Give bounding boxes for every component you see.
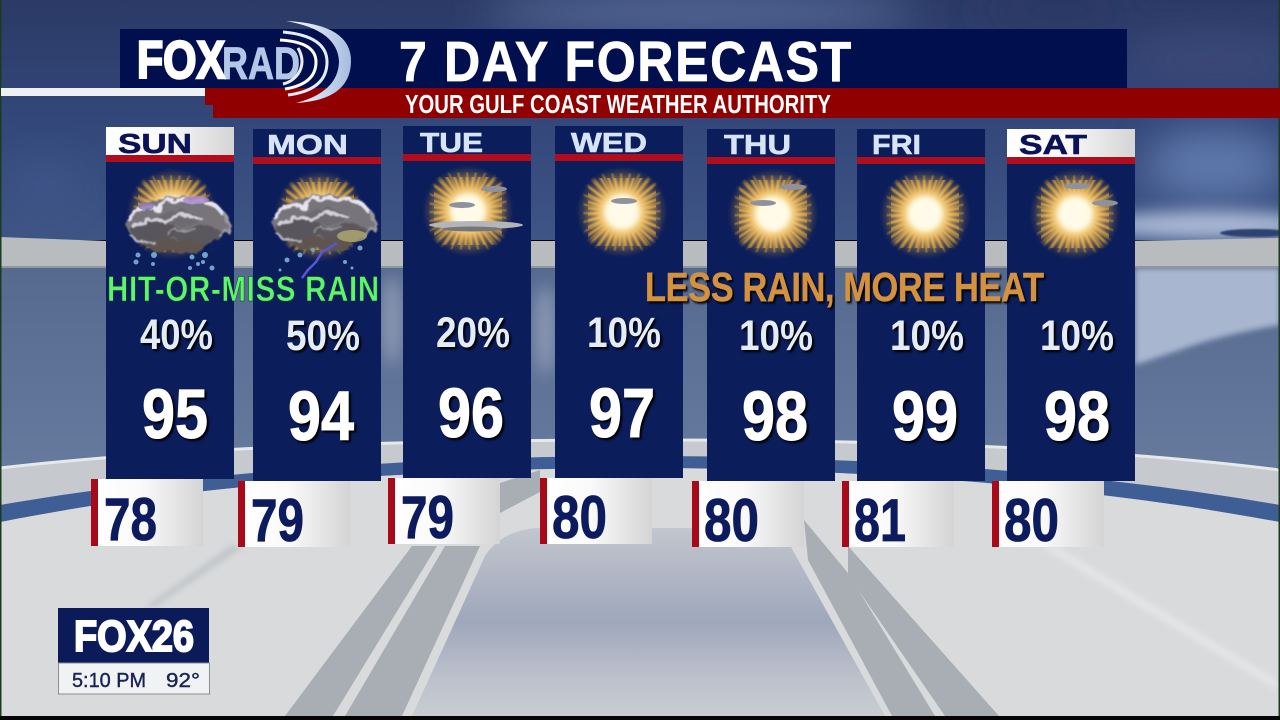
icon: sun [576, 166, 668, 258]
precipitation chance: 20% [436, 309, 510, 357]
panel: Saturday [1007, 129, 1135, 481]
panel: Thursday [707, 129, 835, 481]
logo: FOX RAD: RAD [222, 38, 300, 89]
panel: Wednesday [555, 126, 683, 478]
icon: mostly sunny [1029, 168, 1121, 260]
station name: FOX26 [74, 612, 194, 661]
low: Tuesday [388, 478, 500, 551]
icon: mostly sunny [727, 168, 819, 260]
high temperature: 98 [742, 377, 808, 455]
high temperature: 99 [892, 377, 958, 455]
precipitation chance: 10% [890, 312, 964, 360]
logo: FOX RAD [137, 21, 351, 103]
logo: FOX RAD: FOX [137, 31, 225, 90]
callout: less rain, more heat: LESS RAIN, MORE HEAT [645, 265, 1044, 311]
low: Wednesday: 80 [552, 484, 607, 551]
current temperature: 92° [166, 670, 200, 692]
precipitation chance: 10% [1040, 312, 1114, 360]
low: Monday [238, 481, 350, 554]
low: Saturday: 80 [1004, 487, 1059, 554]
header bar [1, 29, 1280, 119]
precipitation chance: 40% [140, 311, 213, 359]
high temperature: 97 [589, 374, 655, 452]
label: FRI: FRI [872, 129, 921, 160]
panel: Sunday [106, 127, 234, 479]
icon: mostly sunny [422, 165, 523, 257]
low: Thursday [692, 481, 804, 554]
panel: Tuesday [403, 126, 531, 478]
label: WED: WED [571, 127, 647, 158]
precipitation chance: 10% [739, 312, 813, 360]
label: MON: MON [267, 129, 348, 160]
low: Sunday [91, 479, 203, 553]
callout: hit-or-miss rain: HIT-OR-MISS RAIN [107, 270, 379, 309]
time: 5:10 PM [72, 670, 146, 692]
title: 7 DAY FORECAST [399, 30, 852, 94]
low: Thursday: 80 [704, 487, 759, 554]
low: Saturday [992, 481, 1104, 554]
low: Friday: 81 [854, 487, 906, 554]
label: THU: THU [724, 129, 791, 160]
low: Tuesday: 79 [401, 484, 454, 551]
low: Sunday: 78 [104, 486, 157, 553]
high temperature: 96 [438, 374, 504, 452]
label: SUN: SUN [118, 128, 192, 159]
high temperature: 94 [288, 377, 354, 455]
icon: storm cloud [126, 168, 228, 270]
high temperature: 95 [142, 375, 208, 453]
low: Monday: 79 [251, 487, 304, 554]
precipitation chance: 50% [286, 312, 360, 360]
icon: thunderstorm cloud [273, 170, 374, 278]
icon: sun [879, 168, 971, 260]
high temperature: 98 [1044, 377, 1110, 455]
panel: Monday [253, 129, 381, 481]
low: Wednesday [540, 478, 652, 551]
label: SAT: SAT [1019, 129, 1087, 160]
subtitle: YOUR GULF COAST WEATHER AUTHORITY [405, 90, 831, 119]
panel: Friday [857, 129, 985, 481]
precipitation chance: 10% [587, 309, 661, 357]
station bug: FOX 26 [58, 608, 210, 694]
label: TUE: TUE [420, 127, 483, 158]
low: Friday [842, 481, 954, 554]
